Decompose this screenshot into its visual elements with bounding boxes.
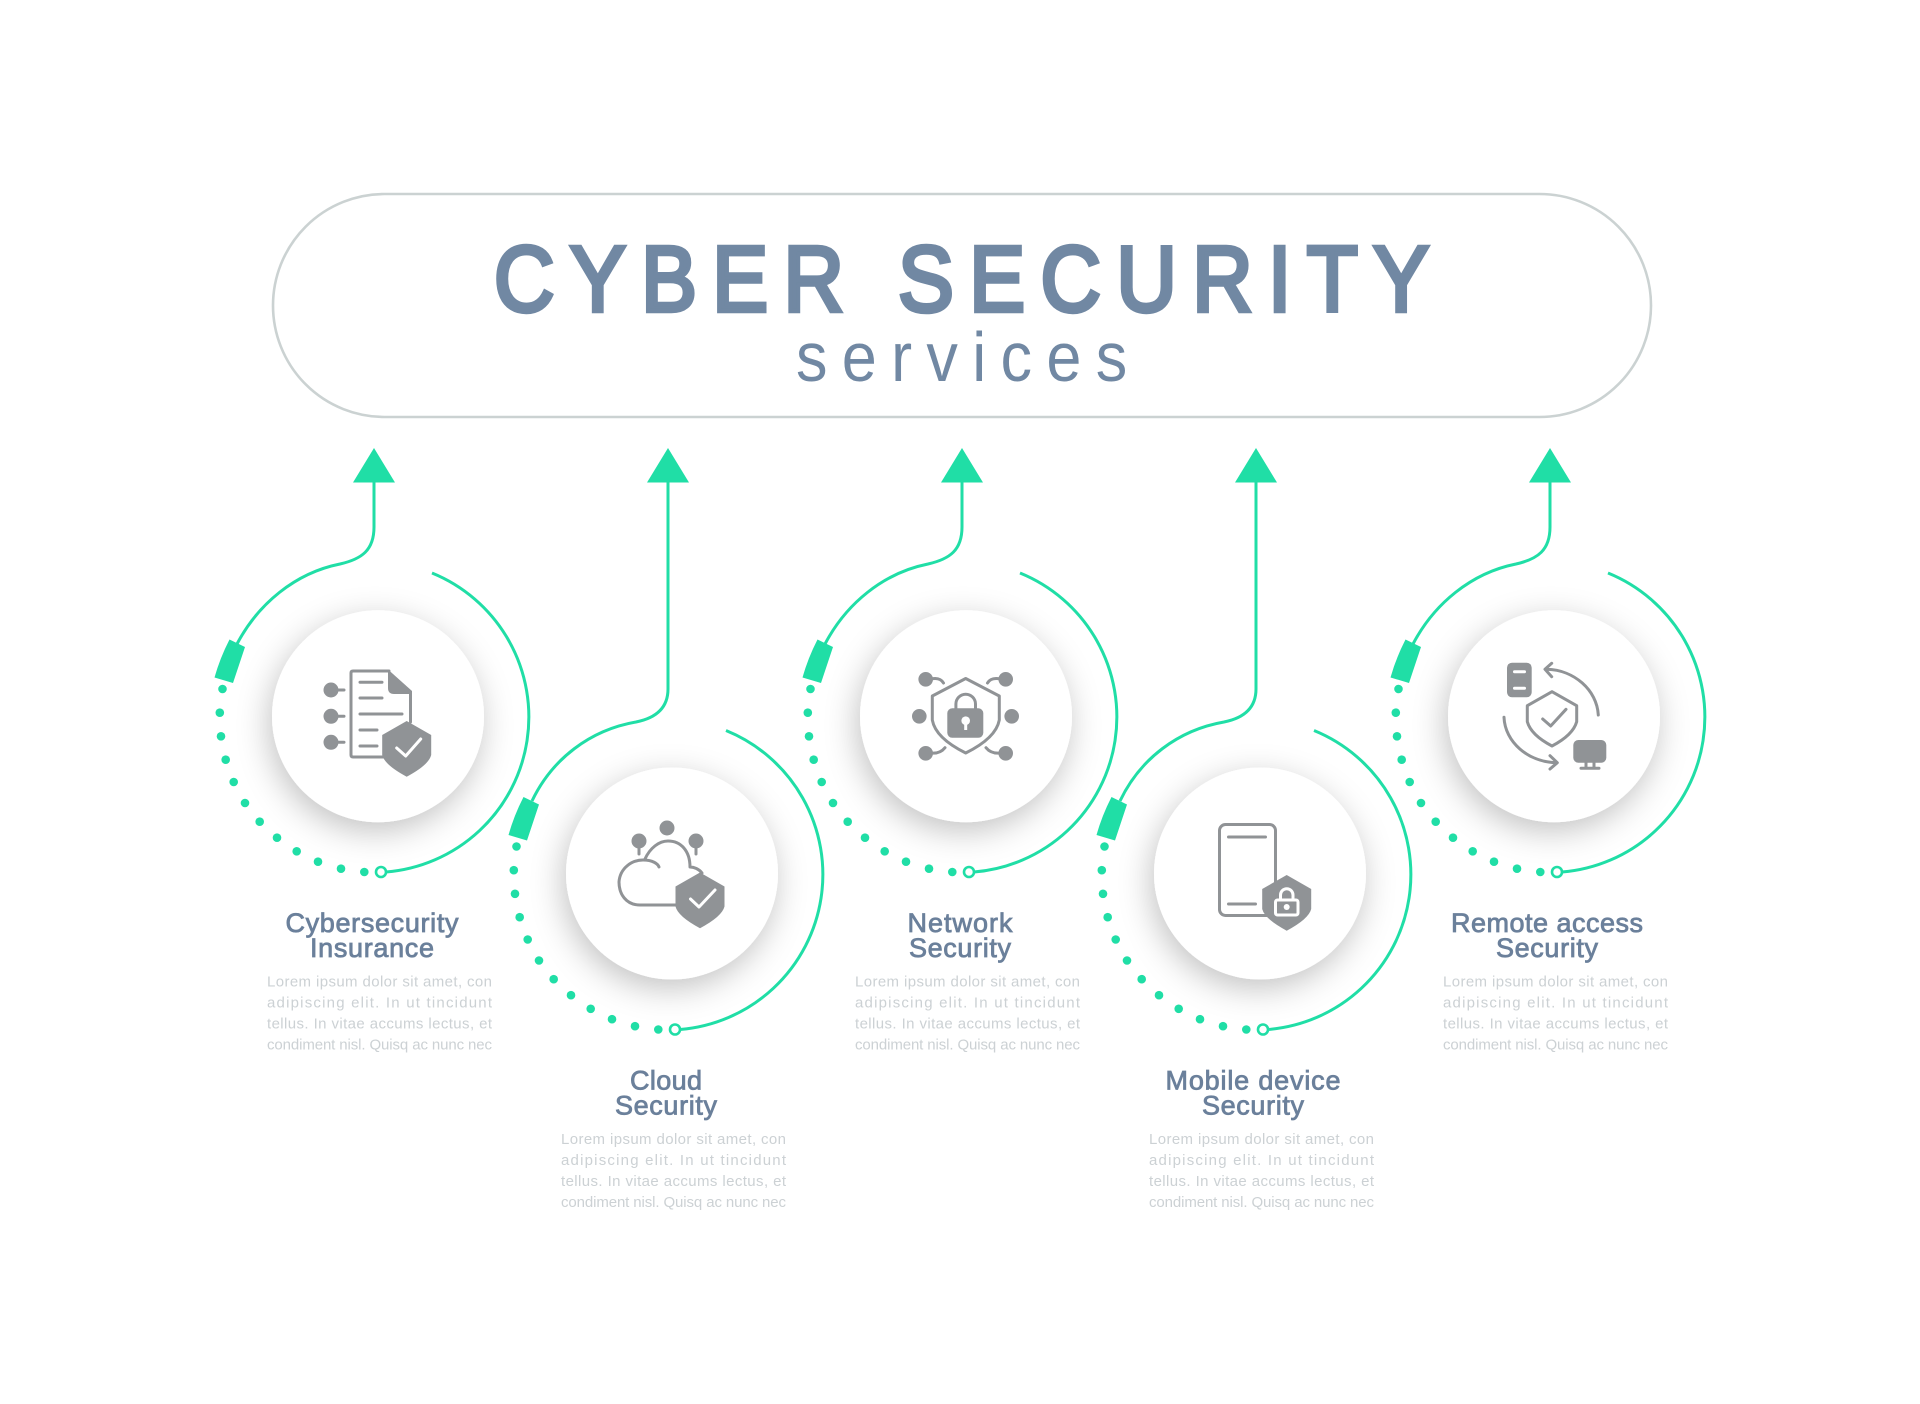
body text bbox=[1149, 1131, 1375, 1211]
circle bbox=[566, 768, 778, 980]
ring with dots bbox=[508, 730, 823, 1034]
heading: Network bbox=[908, 908, 1013, 938]
panel: remote access security bbox=[1390, 448, 1705, 1054]
body text: Lorem ipsum dolor sit amet, con bbox=[561, 1131, 786, 1148]
body text: tellus. In vitae accums lectus, et bbox=[267, 1016, 493, 1032]
body text: adipiscing elit. In ut tincidunt bbox=[267, 994, 493, 1012]
icon: cloud with shield bbox=[619, 820, 724, 928]
icon: document with shield bbox=[324, 670, 431, 777]
ring with dots bbox=[214, 573, 529, 877]
body text: Lorem ipsum dolor sit amet, con bbox=[855, 974, 1080, 990]
pill outline bbox=[273, 194, 1651, 417]
arrow and connector bbox=[1120, 448, 1277, 801]
body text: condiment nisl. Quisq ac nunc nec bbox=[267, 1036, 492, 1054]
panel: cloud security bbox=[508, 448, 823, 1211]
panel: cybersecurity insurance bbox=[214, 448, 529, 1054]
circle bbox=[1448, 610, 1660, 822]
panel: network security bbox=[802, 448, 1117, 1054]
body text bbox=[267, 974, 493, 1054]
body text: adipiscing elit. In ut tincidunt bbox=[855, 994, 1081, 1012]
ring with dots bbox=[1390, 573, 1705, 877]
circle bbox=[1154, 768, 1366, 980]
body text: condiment nisl. Quisq ac nunc nec bbox=[561, 1194, 786, 1211]
circle bbox=[860, 610, 1072, 822]
arrow and connector bbox=[1413, 448, 1571, 644]
arrow and connector bbox=[237, 448, 395, 644]
heading: Security bbox=[909, 933, 1012, 963]
body text: tellus. In vitae accums lectus, et bbox=[855, 1016, 1081, 1032]
body text: condiment nisl. Quisq ac nunc nec bbox=[855, 1036, 1080, 1054]
body text: Lorem ipsum dolor sit amet, con bbox=[1149, 1131, 1374, 1148]
body text: adipiscing elit. In ut tincidunt bbox=[1443, 994, 1669, 1012]
icon: shield lock network bbox=[912, 672, 1019, 761]
body text bbox=[855, 974, 1081, 1054]
heading: Cybersecurity bbox=[286, 908, 459, 938]
body text: condiment nisl. Quisq ac nunc nec bbox=[1443, 1036, 1668, 1054]
subtitle: services: services bbox=[796, 319, 1127, 397]
circle bbox=[272, 610, 484, 822]
body text: Lorem ipsum dolor sit amet, con bbox=[267, 974, 492, 990]
arrow and connector bbox=[825, 448, 983, 644]
body text bbox=[1443, 974, 1669, 1054]
panel: mobile device security bbox=[1096, 448, 1411, 1211]
icon: phone with shield lock bbox=[1220, 824, 1311, 931]
body text: Lorem ipsum dolor sit amet, con bbox=[1443, 974, 1668, 990]
icon: shield with sync between server and monitor bbox=[1504, 663, 1606, 769]
body text: tellus. In vitae accums lectus, et bbox=[1443, 1016, 1669, 1032]
heading: Cloud bbox=[630, 1066, 702, 1096]
ring with dots bbox=[1096, 730, 1411, 1034]
title panel bbox=[273, 194, 1651, 417]
ring with dots bbox=[802, 573, 1117, 877]
body text: tellus. In vitae accums lectus, et bbox=[561, 1173, 787, 1190]
body text: condiment nisl. Quisq ac nunc nec bbox=[1149, 1194, 1374, 1211]
body text bbox=[561, 1131, 787, 1211]
title: cyber security: CYBER SECURITY bbox=[494, 227, 1429, 331]
heading: Insurance bbox=[310, 933, 434, 963]
body text: adipiscing elit. In ut tincidunt bbox=[561, 1152, 787, 1169]
heading: Security bbox=[1496, 933, 1598, 963]
arrow and connector bbox=[532, 448, 689, 801]
body text: tellus. In vitae accums lectus, et bbox=[1149, 1173, 1375, 1190]
heading: Remote access bbox=[1451, 908, 1643, 938]
heading: Mobile device bbox=[1166, 1066, 1340, 1096]
heading: Security bbox=[615, 1090, 718, 1120]
body text: adipiscing elit. In ut tincidunt bbox=[1149, 1152, 1375, 1169]
heading: Security bbox=[1202, 1090, 1304, 1120]
